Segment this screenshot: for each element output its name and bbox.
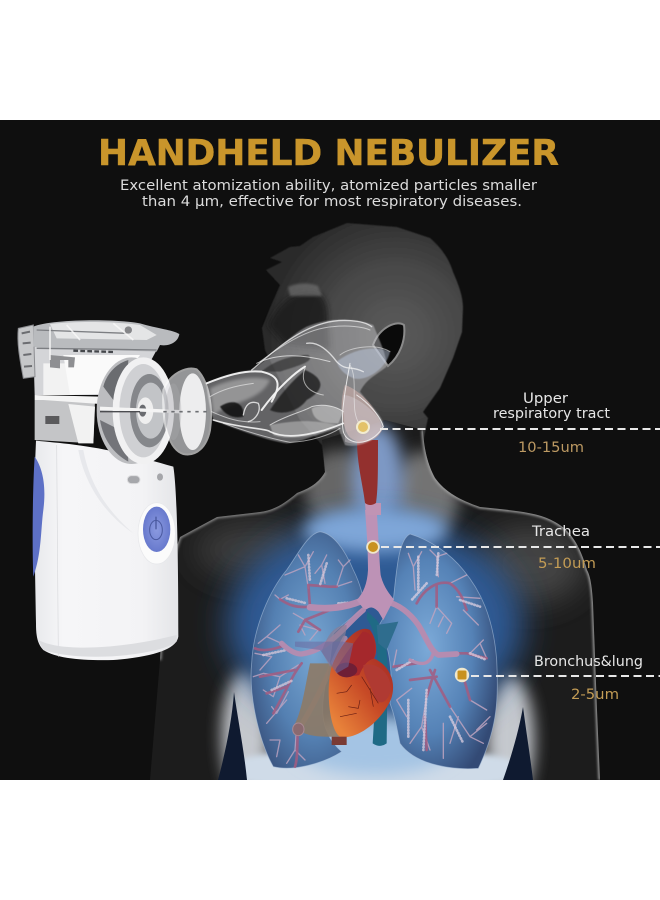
label: bronchus and lung: Bronchus&lung — [534, 654, 643, 670]
head silhouette — [262, 223, 463, 472]
hairline highlight — [288, 283, 322, 296]
torso silhouette — [150, 420, 600, 780]
indicator lights — [127, 473, 163, 484]
hinge — [18, 325, 35, 378]
body shading — [78, 450, 133, 533]
blue glow chest — [227, 520, 523, 730]
value: 5-10um: 5-10um — [538, 556, 596, 572]
label: upper respiratory tract: respiratory tract — [493, 406, 611, 422]
subtitle — [120, 178, 537, 210]
label: upper respiratory tract: Upper — [523, 391, 568, 407]
transparent medicine tank — [33, 347, 157, 395]
mesh ring — [97, 357, 180, 464]
blue side grip — [33, 457, 44, 577]
shoulder glow — [475, 527, 585, 603]
nebulizer mist — [207, 320, 390, 446]
label: trachea: Trachea — [531, 524, 590, 540]
heart — [295, 625, 393, 745]
nebulizer device — [18, 320, 211, 660]
infographic canvas — [0, 120, 660, 780]
subtitle: Excellent atomization ability, atomized particles smaller — [120, 178, 537, 194]
human figure — [140, 223, 610, 805]
title: HANDHELD NEBULIZER — [98, 133, 559, 174]
mouthpiece — [163, 369, 211, 454]
bronchial tree right — [387, 550, 490, 758]
left lung — [251, 532, 364, 768]
white glow around lower lungs — [222, 670, 270, 800]
bronchial tree left — [253, 552, 370, 767]
face shadow — [268, 292, 330, 350]
white body — [34, 441, 178, 660]
power button — [138, 503, 175, 564]
ear — [373, 323, 404, 366]
label: upper respiratory tract — [493, 391, 611, 422]
dark panel — [0, 120, 660, 780]
marker: upper respiratory tract — [356, 420, 660, 434]
lungs and heart — [251, 510, 497, 769]
windpipe upper section — [342, 385, 382, 515]
body seam — [57, 445, 58, 657]
neck glow — [304, 450, 376, 530]
value: 10-15um: 10-15um — [518, 440, 584, 456]
clear lid — [33, 320, 179, 352]
marker: trachea — [366, 540, 660, 554]
subtitle: than 4 μm, effective for most respiratory diseases. — [142, 194, 522, 210]
trachea lower section — [357, 510, 394, 620]
value: 2-5um: 2-5um — [571, 687, 619, 703]
armpit wedges — [218, 692, 533, 780]
right atrium — [293, 663, 340, 737]
grey middle chamber — [35, 400, 95, 443]
marker: bronchus and lung — [455, 668, 660, 682]
shoulder rim light — [160, 472, 325, 660]
right lung — [378, 534, 497, 769]
descending aorta — [367, 612, 388, 746]
